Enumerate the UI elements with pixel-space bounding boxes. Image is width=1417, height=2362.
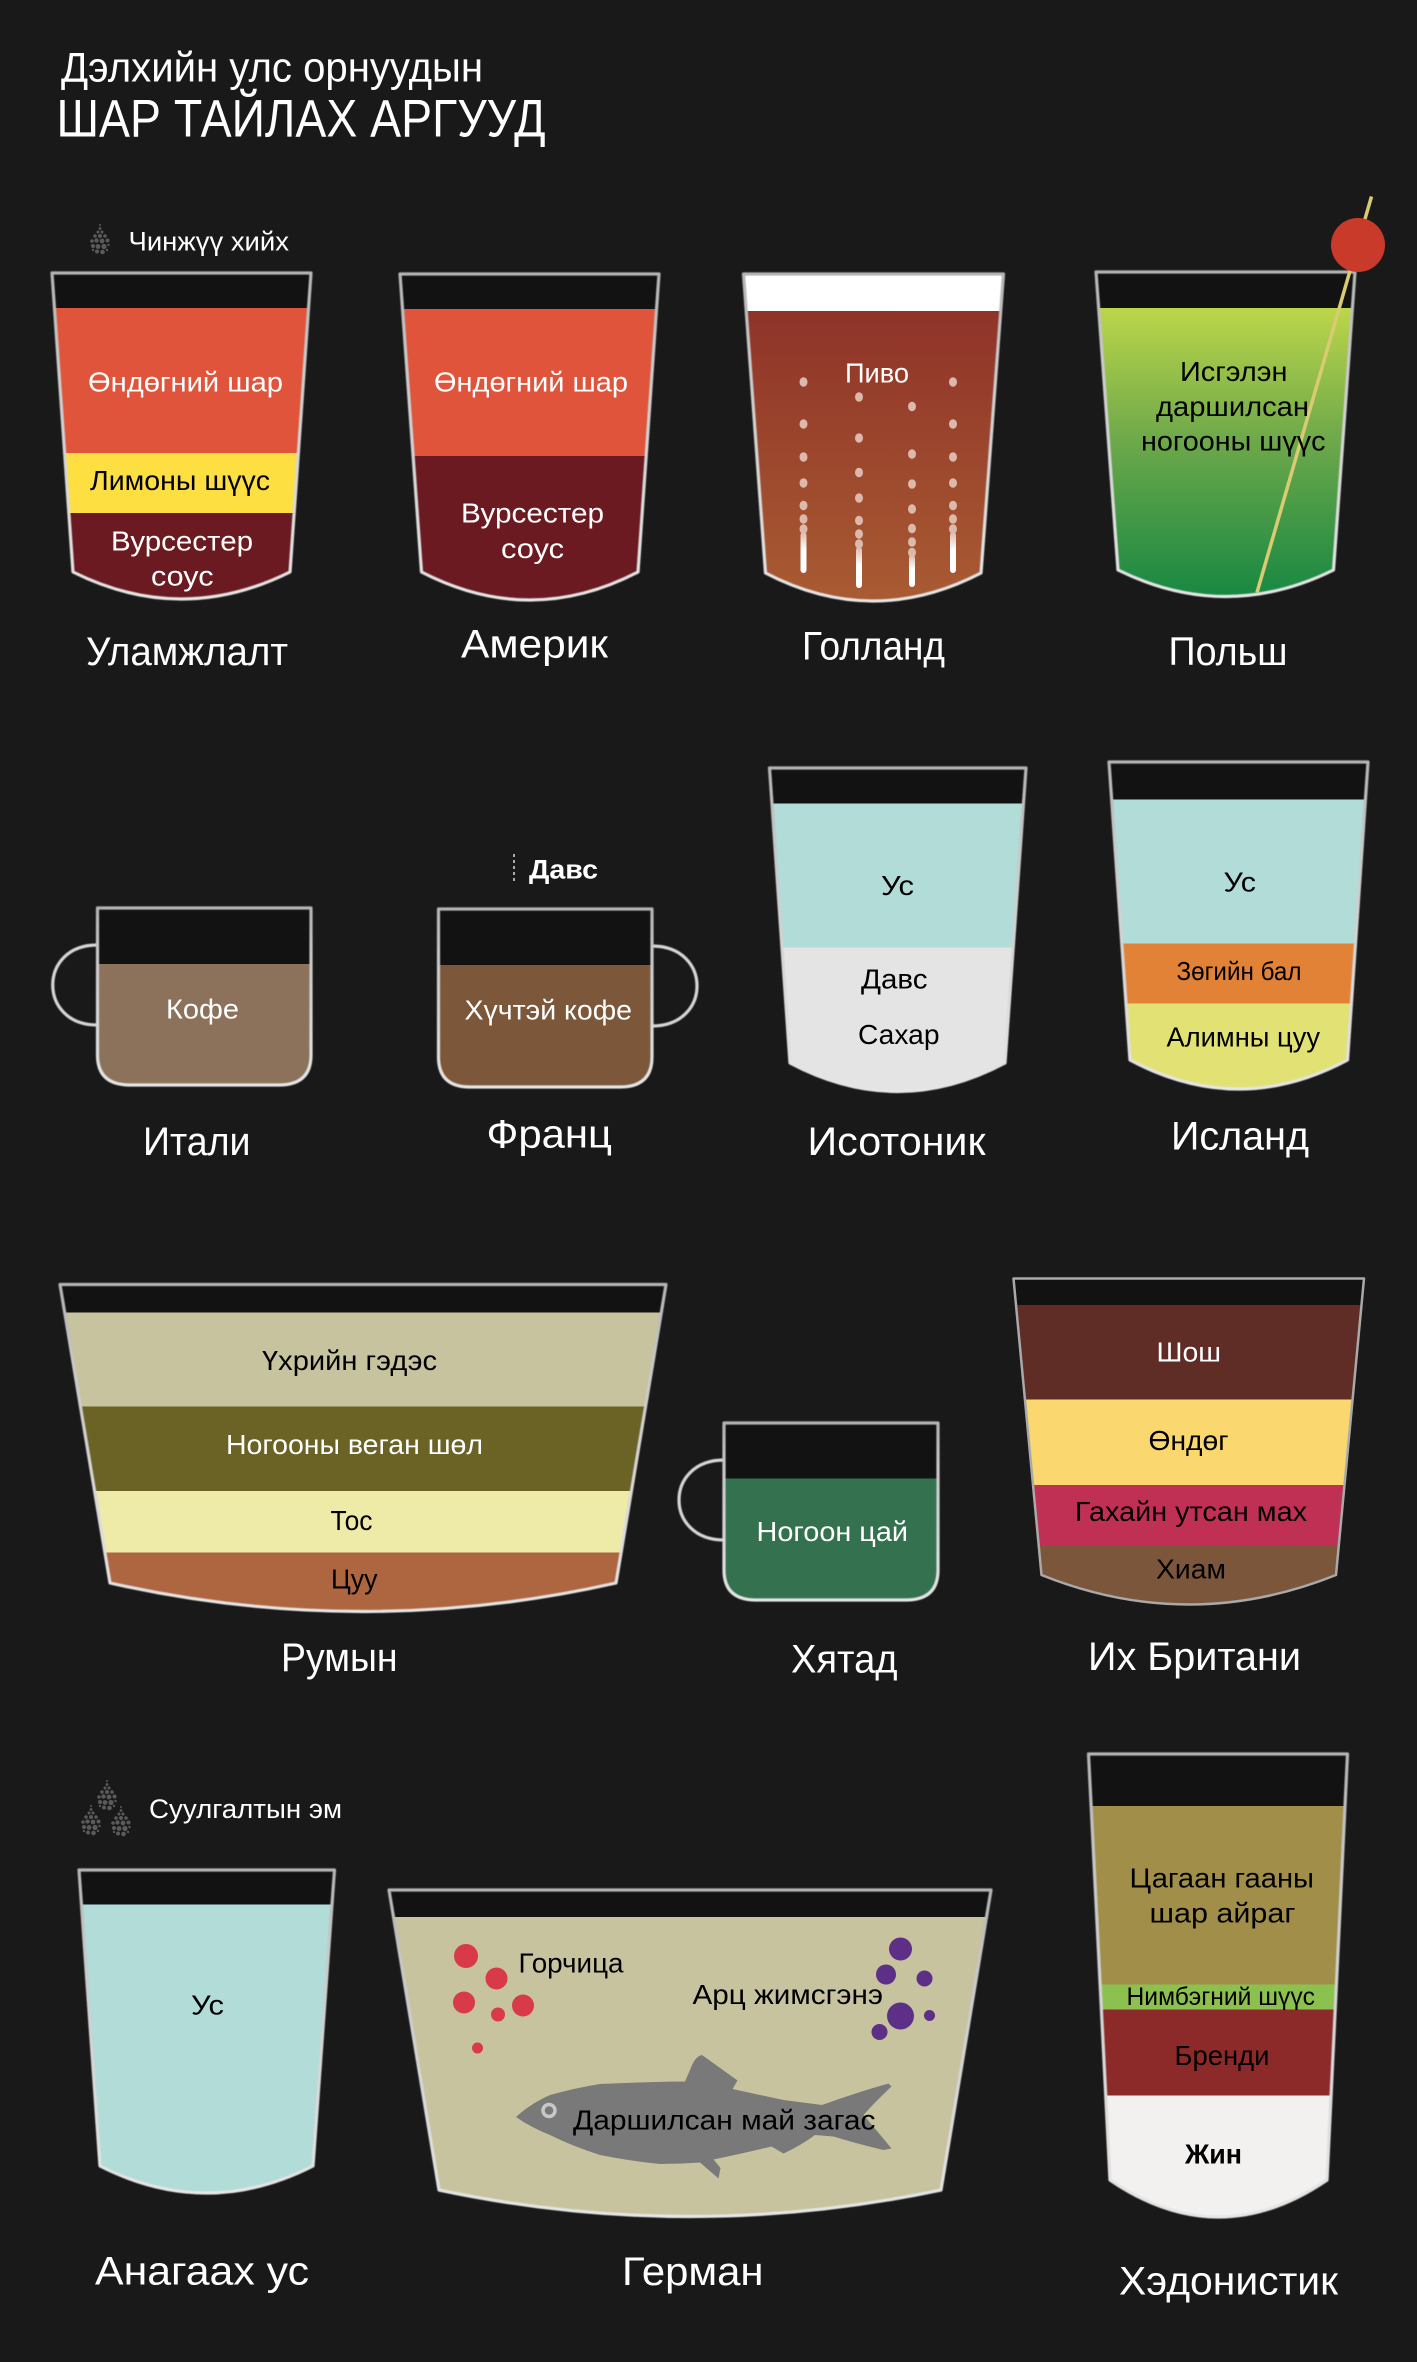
note text: Суулгалтын эм xyxy=(149,1794,342,1824)
label: Хэдонистик: Хэдонистик xyxy=(1119,2260,1338,2304)
ingredient: соус: соус xyxy=(501,533,564,564)
ingredient: Нимбэгний шүүс: Нимбэгний шүүс xyxy=(1126,1983,1315,2011)
ingredient: Ногоон цай: Ногоон цай xyxy=(756,1516,908,1547)
ingredient: Ногооны веган шөл: Ногооны веган шөл xyxy=(226,1429,483,1460)
title line 2: ШАР ТАЙЛАХ АРГУУД xyxy=(56,88,546,148)
ingredient: Лимоны шүүс: Лимоны шүүс xyxy=(90,465,270,496)
panel: Уламжлалт glass xyxy=(40,270,330,603)
ingredient: Шош: Шош xyxy=(1156,1336,1221,1368)
ingredient: Горчица: Горчица xyxy=(518,1948,624,1978)
glass outline xyxy=(744,274,1004,601)
panel: Польш glass xyxy=(1090,196,1385,603)
ingredient: Кофе: Кофе xyxy=(166,994,239,1024)
ingredient: Цагаан гааны: Цагаан гааны xyxy=(1130,1862,1314,1894)
ingredient: Үхрийн гэдэс: Үхрийн гэдэс xyxy=(262,1345,437,1376)
mug outline xyxy=(724,1423,938,1600)
ingredient: Ус: Ус xyxy=(881,870,914,901)
juniper berries xyxy=(872,1938,935,2040)
glass outline xyxy=(1109,762,1368,1089)
icon: single dotted drop xyxy=(90,224,110,254)
label: Хятад: Хятад xyxy=(791,1638,898,1682)
panel: Герман bowl xyxy=(380,1885,1000,2227)
ingredient: Арц жимсгэнэ: Арц жимсгэнэ xyxy=(692,1979,883,2010)
mug handle xyxy=(652,946,697,1026)
title xyxy=(56,44,546,148)
ingredient: Алимны цуу: Алимны цуу xyxy=(1166,1022,1320,1052)
ingredient: Ус: Ус xyxy=(1224,866,1256,898)
ingredient: Гахайн утсан мах: Гахайн утсан мах xyxy=(1075,1496,1307,1527)
note: Чинжүү хийх xyxy=(90,224,290,256)
label: Польш: Польш xyxy=(1168,630,1288,674)
ingredient: Өндөгний шар: Өндөгний шар xyxy=(88,366,283,398)
glass outline xyxy=(770,768,1026,1092)
label: Их Британи: Их Британи xyxy=(1088,1635,1301,1679)
label: Франц: Франц xyxy=(486,1112,612,1156)
ingredient: Тос: Тос xyxy=(330,1505,372,1536)
label: Анагаах ус: Анагаах ус xyxy=(95,2250,309,2294)
brine xyxy=(394,1917,986,2216)
ingredient: шар айраг: шар айраг xyxy=(1150,1898,1296,1928)
bubbles xyxy=(800,377,957,557)
bubble streaks xyxy=(800,532,956,588)
ingredient: Хиам: Хиам xyxy=(1156,1554,1226,1584)
ingredient: даршилсан: даршилсан xyxy=(1156,391,1309,422)
mug handle xyxy=(679,1460,724,1540)
label: Уламжлалт: Уламжлалт xyxy=(86,630,288,674)
ingredient: Пиво: Пиво xyxy=(845,358,909,388)
beer and foam xyxy=(744,274,1002,600)
ingredient: Зөгийн бал: Зөгийн бал xyxy=(1176,956,1302,986)
note text: Давс xyxy=(529,854,598,884)
pickled herring xyxy=(516,2055,892,2178)
glass outline xyxy=(52,273,311,599)
ingredient: Өндөг: Өндөг xyxy=(1148,1425,1228,1456)
panel: Америк glass xyxy=(390,270,670,606)
green tea xyxy=(725,1478,937,1599)
mug outline xyxy=(98,908,311,1085)
ingredient: Давс: Давс xyxy=(861,964,928,994)
icon: three dotted drops xyxy=(81,1780,131,1836)
panel: Итали mug xyxy=(53,905,320,1089)
label: Исотоник: Исотоник xyxy=(808,1120,986,1164)
cherry xyxy=(1331,218,1385,272)
note text: Чинжүү хийх xyxy=(128,226,290,256)
liquid layers xyxy=(55,308,308,598)
cocktail stick xyxy=(1257,196,1372,592)
ingredient: Ус: Ус xyxy=(191,1990,224,2020)
ingredient: Сахар: Сахар xyxy=(858,1019,940,1050)
glass outline xyxy=(60,1284,666,1612)
panel: Анагаах ус glass xyxy=(70,1865,345,2200)
ingredient: Өндөгний шар: Өндөгний шар xyxy=(434,366,628,398)
glass outline xyxy=(79,1870,334,2193)
ingredient: Даршилсан май загас: Даршилсан май загас xyxy=(573,2104,876,2136)
panel: Исотоник glass xyxy=(760,765,1035,1098)
ingredient: Жин: Жин xyxy=(1184,2138,1242,2170)
note: Суулгалтын эм xyxy=(81,1780,342,1836)
green liquid xyxy=(1100,308,1352,596)
ingredient: ногооны шүүс: ногооны шүүс xyxy=(1141,426,1326,456)
mug handle xyxy=(53,945,97,1025)
glass outline xyxy=(389,1890,991,2216)
title line 1: Дэлхийн улс орнуудын xyxy=(61,44,483,90)
panel: Голланд beer glass xyxy=(735,270,1015,606)
dotted salt line xyxy=(513,854,515,882)
label: Румын: Румын xyxy=(281,1636,398,1680)
mug outline xyxy=(438,909,652,1087)
label: Герман: Герман xyxy=(622,2250,764,2294)
water xyxy=(82,1904,332,2192)
panel: Хэдонистик tall glass xyxy=(1080,1750,1355,2220)
ingredient: Цуу: Цуу xyxy=(331,1564,378,1594)
liquid layers xyxy=(1017,1305,1360,1604)
liquid layers xyxy=(403,309,656,599)
label: Исланд: Исланд xyxy=(1171,1114,1309,1158)
glass outline xyxy=(400,274,659,600)
ingredient: Вурсестер: Вурсестер xyxy=(111,526,253,556)
glass outline xyxy=(1088,1754,1348,2217)
coffee xyxy=(98,964,310,1084)
ingredient: Исгэлэн: Исгэлэн xyxy=(1180,356,1288,387)
liquid layers xyxy=(772,804,1023,1091)
panel: Исланд glass xyxy=(1100,760,1380,1098)
glass outline xyxy=(1096,272,1355,596)
note: Давс xyxy=(514,854,598,884)
ingredient: Бренди: Бренди xyxy=(1174,2040,1270,2071)
label: Итали: Итали xyxy=(143,1120,250,1164)
mustard seeds xyxy=(453,1944,534,2054)
liquid layers xyxy=(1112,800,1365,1088)
liquid layers xyxy=(1092,1806,1344,2216)
label: Америк: Америк xyxy=(461,622,609,666)
ingredient: Вурсестер: Вурсестер xyxy=(461,498,604,528)
ingredient: соус: соус xyxy=(151,560,214,592)
panel: Франц mug xyxy=(430,905,697,1090)
panel: Хятад mug xyxy=(679,1420,945,1604)
panel: Румын wide glass xyxy=(50,1280,675,1614)
glass outline xyxy=(1014,1278,1364,1604)
strong coffee xyxy=(440,965,651,1086)
label: Голланд: Голланд xyxy=(802,624,945,668)
liquid layers xyxy=(66,1312,660,1611)
ingredient: Хүчтэй кофе: Хүчтэй кофе xyxy=(464,994,632,1026)
panel: Их Британи glass xyxy=(1005,1275,1375,1610)
